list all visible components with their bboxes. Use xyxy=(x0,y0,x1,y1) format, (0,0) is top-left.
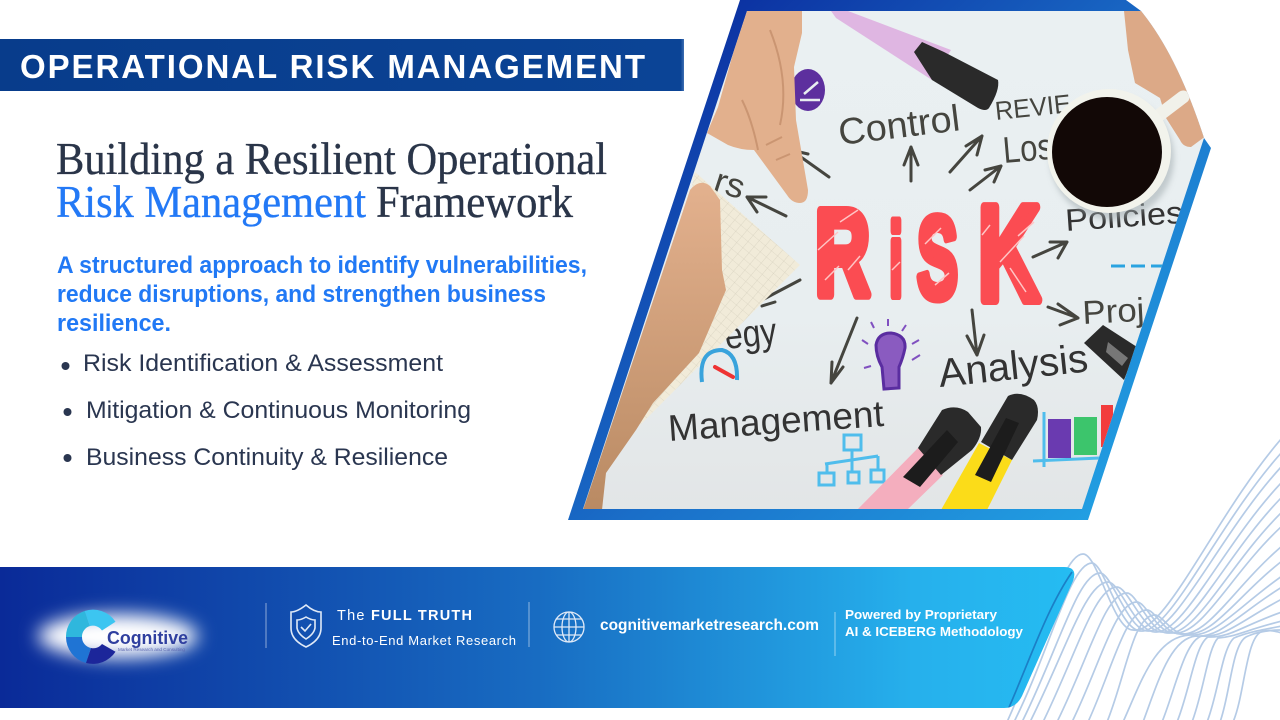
main heading: Building a Resilient Operational xyxy=(56,134,607,184)
subheading: reduce disruptions, and strengthen business xyxy=(57,281,546,308)
handwritten labels: Proj xyxy=(1081,291,1145,331)
handwritten labels: Policies xyxy=(1064,195,1184,238)
RISK lettering: R xyxy=(815,185,870,321)
RISK lettering: K xyxy=(978,178,1040,329)
org chart sketch xyxy=(819,435,884,485)
tagline: full truth xyxy=(332,608,516,648)
subheading: resilience. xyxy=(57,310,171,337)
bullet list xyxy=(62,350,471,471)
RISK lettering: S xyxy=(917,193,958,323)
subheading: A structured approach to identify vulnerabilities, xyxy=(57,252,587,279)
title banner: OPERATIONAL RISK MANAGEMENT xyxy=(20,48,645,85)
handwritten labels: Los xyxy=(1001,126,1055,171)
footer band xyxy=(0,567,1074,708)
handwritten labels: rs xyxy=(710,161,750,207)
notebook xyxy=(640,172,800,425)
handwritten labels: Control xyxy=(836,97,962,153)
handwritten labels: Analysis xyxy=(936,337,1090,396)
lightbulb sketch xyxy=(862,319,920,389)
blue dashes xyxy=(1111,264,1163,268)
hand: left lower xyxy=(583,183,726,510)
main heading xyxy=(56,134,607,227)
RISK lettering xyxy=(816,202,1042,305)
purple highlighter xyxy=(831,11,998,110)
bullet list: Business Continuity & Resilience xyxy=(86,444,448,471)
methodology note: AI & ICEBERG Methodology xyxy=(845,624,1024,639)
bullet list: Mitigation & Continuous Monitoring xyxy=(86,397,471,424)
tagline: full truth: The FULL TRUTH xyxy=(337,608,472,624)
purple sticker xyxy=(791,69,825,111)
website: cognitivemarketresearch.com xyxy=(600,617,819,634)
hand: pointing finger xyxy=(707,11,808,203)
logo xyxy=(38,610,198,664)
photo: risk whiteboard xyxy=(560,0,1220,520)
gauge sketch xyxy=(701,350,737,382)
methodology note xyxy=(845,607,1024,639)
methodology note: Powered by Proprietary xyxy=(845,607,998,622)
icon: globe xyxy=(554,612,584,642)
pink highlighter xyxy=(857,407,981,510)
RISK lettering: i xyxy=(889,203,903,319)
main heading: Framework xyxy=(376,177,573,227)
handwritten labels xyxy=(667,88,1184,449)
hand: right top xyxy=(1124,11,1210,147)
logo: Market Research and Consulting xyxy=(118,647,185,652)
divider xyxy=(266,602,835,656)
wave overlapping footer xyxy=(1007,572,1072,712)
photo frame xyxy=(568,0,1211,520)
yellow highlighter xyxy=(941,394,1038,510)
handwritten labels: egy xyxy=(723,311,779,358)
tagline: full truth: End-to-End Market Research xyxy=(332,633,516,648)
subheading xyxy=(57,252,587,337)
arrows xyxy=(747,136,1078,383)
bar chart sketch xyxy=(1033,405,1113,467)
handwritten labels: REVIE xyxy=(993,88,1072,126)
dark marker xyxy=(1084,325,1137,380)
logo: Cognitive xyxy=(107,628,188,648)
main heading: Risk Management xyxy=(56,177,366,227)
decorative wave lines xyxy=(1007,438,1280,720)
bullet list: Risk Identification & Assessment xyxy=(83,350,443,377)
handwritten labels: Management xyxy=(667,393,886,449)
icon: shield xyxy=(291,605,321,647)
coffee cup xyxy=(1047,89,1183,220)
title banner xyxy=(0,39,684,91)
